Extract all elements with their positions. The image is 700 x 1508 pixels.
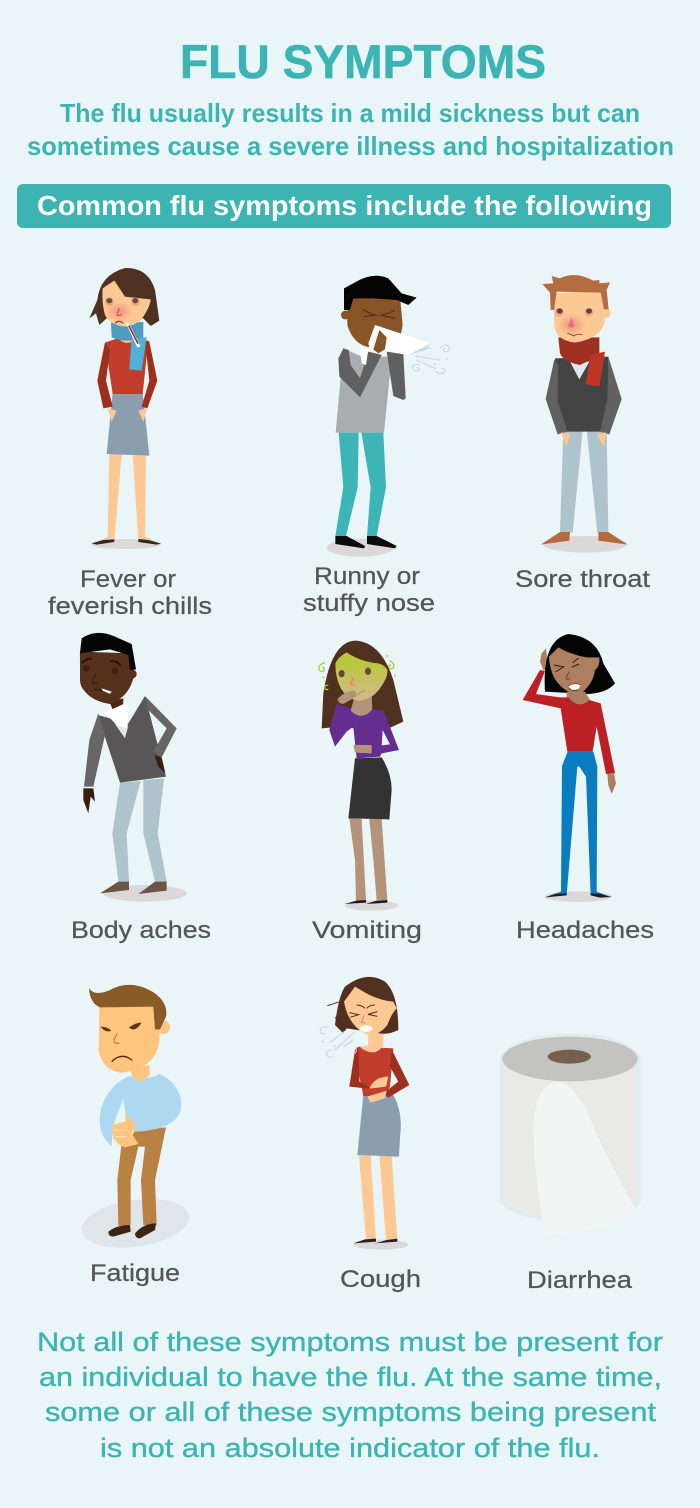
figure: woman vomiting <box>319 641 403 911</box>
icon: toilet paper roll <box>500 1033 641 1233</box>
figure: man with fatigue <box>78 985 192 1254</box>
figure: woman coughing <box>320 977 409 1250</box>
title: FLU SYMPTOMS <box>180 35 546 88</box>
label: headaches: Headaches <box>516 917 654 944</box>
label: body aches: Body aches <box>71 917 211 944</box>
banner: common symptoms: Common flu symptoms include the following <box>37 190 652 221</box>
figure: man with runny nose <box>327 276 449 557</box>
closing note <box>37 1327 663 1463</box>
label: fever: feverish chills <box>48 593 212 620</box>
banner: common symptoms <box>17 184 671 228</box>
label: vomiting: Vomiting <box>312 917 422 944</box>
label: runny nose <box>303 563 435 617</box>
figure: woman with fever <box>89 268 161 549</box>
closing note: Not all of these symptoms must be present for <box>37 1327 663 1357</box>
figure: woman with headache <box>523 634 616 902</box>
closing note: is not an absolute indicator of the flu. <box>100 1433 600 1463</box>
figure: man with sore throat <box>541 275 628 553</box>
subtitle: The flu usually results in a mild sickness but can <box>60 98 640 128</box>
label: runny nose: stuffy nose <box>303 590 435 617</box>
subtitle <box>27 98 674 161</box>
label: fever <box>48 566 212 620</box>
closing note: an individual to have the flu. At the same time, <box>39 1362 662 1392</box>
subtitle: sometimes cause a severe illness and hospitalization <box>27 131 674 161</box>
closing note: some or all of these symptoms being present <box>45 1397 657 1427</box>
label: sore throat: Sore throat <box>515 566 650 593</box>
label: runny nose: Runny or <box>314 563 420 590</box>
label: fever: Fever or <box>80 566 176 593</box>
label: diarrhea: Diarrhea <box>527 1267 633 1294</box>
label: fatigue: Fatigue <box>90 1260 180 1287</box>
label: cough: Cough <box>340 1266 421 1293</box>
figure: man with body aches <box>79 633 187 902</box>
